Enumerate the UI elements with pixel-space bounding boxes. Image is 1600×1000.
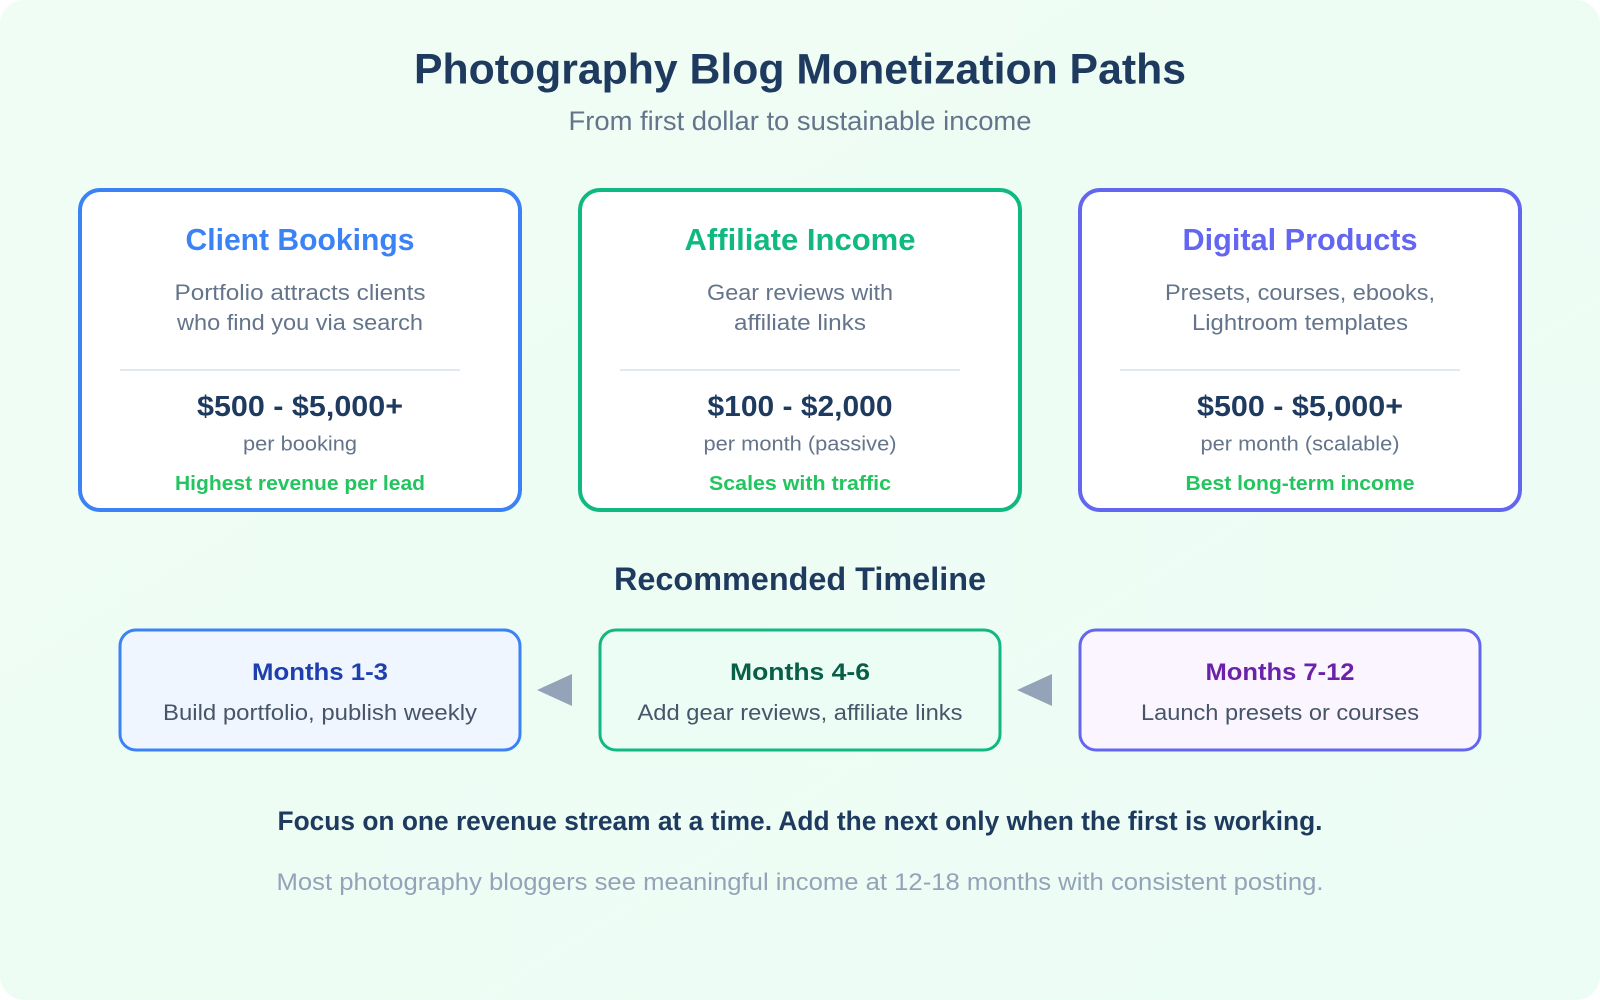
- card description: [707, 280, 893, 335]
- benefit: Scales with traffic: [709, 472, 891, 495]
- arrow: [537, 674, 572, 706]
- card heading: Affiliate Income: [684, 223, 916, 257]
- arrow: [1017, 674, 1052, 706]
- key takeaway: Focus on one revenue stream at a time. Add the next only when the first is working.: [278, 806, 1322, 836]
- panel: digital products: [1080, 190, 1520, 510]
- timeline heading: Recommended Timeline: [614, 561, 986, 597]
- step description: Build portfolio, publish weekly: [163, 700, 478, 725]
- price unit: per booking: [243, 432, 357, 456]
- timeline step: months 1-3: [120, 630, 520, 750]
- card heading: Digital Products: [1182, 223, 1418, 257]
- subtitle: From first dollar to sustainable income: [568, 106, 1032, 136]
- benefit: Highest revenue per lead: [175, 472, 425, 495]
- footnote: Most photography bloggers see meaningful income at 12-18 months with consistent posting.: [276, 869, 1324, 896]
- card description: who find you via search: [176, 310, 423, 335]
- timeline step: months 7-12: [1080, 630, 1480, 750]
- panel: affiliate income: [580, 190, 1020, 510]
- price: $500 - $5,000+: [1197, 391, 1403, 423]
- card description: [1165, 280, 1435, 335]
- card description: Presets, courses, ebooks,: [1165, 280, 1435, 305]
- price unit: per month (passive): [704, 432, 896, 456]
- card heading: Client Bookings: [186, 223, 414, 257]
- step label: Months 4-6: [730, 659, 870, 686]
- panel: client bookings: [80, 190, 520, 510]
- card description: Portfolio attracts clients: [174, 280, 426, 305]
- price unit: per month (scalable): [1200, 432, 1400, 456]
- step description: Add gear reviews, affiliate links: [638, 700, 962, 725]
- card description: [174, 280, 426, 335]
- step description: Launch presets or courses: [1141, 700, 1419, 725]
- step label: Months 7-12: [1206, 659, 1354, 686]
- card description: Lightroom templates: [1192, 310, 1408, 335]
- title: Photography Blog Monetization Paths: [414, 46, 1186, 94]
- price: $500 - $5,000+: [197, 391, 403, 423]
- price: $100 - $2,000: [708, 391, 892, 423]
- card description: Gear reviews with: [707, 280, 893, 305]
- card description: affiliate links: [734, 310, 866, 335]
- benefit: Best long-term income: [1186, 472, 1414, 495]
- step label: Months 1-3: [252, 659, 388, 686]
- timeline step: months 4-6: [600, 630, 1000, 750]
